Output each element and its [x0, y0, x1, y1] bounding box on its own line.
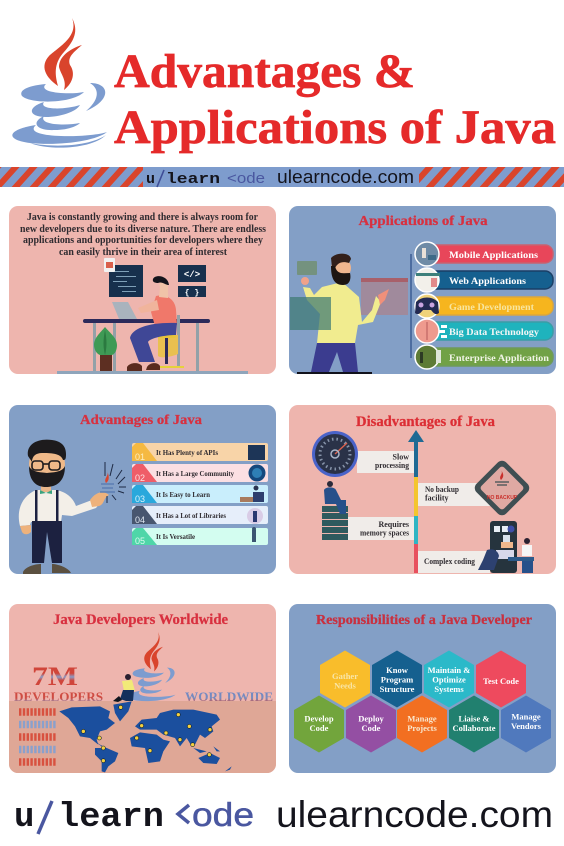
item: Web Applications: Web Applications	[449, 277, 526, 287]
intro text	[20, 212, 266, 258]
item: 02 large community	[132, 464, 268, 483]
heading: Advantages of Java	[80, 413, 202, 428]
lower band	[9, 701, 276, 773]
brand banner: learn	[166, 171, 220, 188]
icon: speedometer	[312, 431, 358, 477]
hexagon: Know Program Structure: Structure	[380, 684, 415, 694]
text: requires memory spaces	[360, 520, 409, 538]
panel: Java developers worldwide	[9, 604, 276, 773]
timeline arrow	[408, 430, 424, 573]
item: Web Applications	[415, 268, 553, 292]
hexagon: Maintain and Optimize Systems: Optimize	[432, 674, 466, 684]
hexagon: Liaise and Collaborate: Liaise &	[459, 714, 489, 724]
footer brand: ulearncode.com	[276, 794, 553, 835]
hexagon: Test Code	[476, 650, 526, 708]
hexagon: Know Program Structure	[372, 650, 422, 708]
hexagon: Manage Vendors	[501, 696, 551, 752]
item: Enterprise Application: Enterprise Application	[449, 354, 550, 364]
illustration: developer at desk: { }	[185, 289, 199, 298]
hexagon: Know Program Structure: Know	[386, 665, 409, 675]
text: slow processing	[375, 452, 409, 470]
illustration: person climbing	[113, 674, 135, 702]
intro text: can easily thrive in their area of interest	[59, 247, 228, 258]
worldwide label: WORLDWIDE	[185, 690, 273, 704]
intro text: new developers due to its diverse nature. There are endless	[20, 224, 266, 235]
text: requires memory spaces: Requires	[378, 520, 409, 529]
hexagon: Deploy Code: Code	[362, 723, 381, 733]
item: Enterprise Application	[415, 345, 553, 369]
heading: Responsibilities of a Java Developer	[316, 613, 532, 628]
item: Game Development: Game Development	[449, 303, 535, 313]
hexagon: Gather Needs	[320, 650, 370, 708]
world map	[59, 701, 232, 772]
hexagon: Gather Needs: Needs	[334, 680, 357, 690]
text: requires memory spaces: memory spaces	[360, 528, 409, 538]
people rows	[19, 712, 57, 762]
hexagon: Develop Code: Code	[310, 723, 329, 733]
item: Big Data Technology	[415, 319, 553, 343]
intro text: applications and opportunities for developers where they	[23, 235, 263, 246]
hexagon: Manage Projects: Manage	[407, 714, 437, 724]
footer brand	[14, 794, 553, 837]
illustration: phone with developers	[478, 521, 534, 573]
text: no backup facility	[425, 485, 460, 502]
icon: no backup diamond: NO BACKUP	[487, 495, 518, 501]
hexagon: Develop Code	[294, 696, 344, 752]
hexagon: Gather Needs: Gather	[332, 671, 358, 681]
text: no backup facility: No backup	[425, 485, 460, 494]
developers label: DEVELOPERS	[14, 690, 103, 704]
icon: server stack with person	[322, 481, 348, 540]
text: no backup facility: facility	[425, 494, 449, 502]
text: slow processing: processing	[375, 461, 409, 470]
icon: Java cup	[128, 632, 176, 701]
brand banner	[0, 167, 564, 188]
panel: applications of Java	[289, 206, 556, 374]
hexagon: Maintain and Optimize Systems: Maintain &	[428, 665, 470, 675]
text: complex coding: Complex coding	[424, 557, 475, 566]
item: 01 plenty of APIs: 01	[135, 452, 145, 462]
icon: no backup diamond	[472, 458, 532, 518]
hexagon: Know Program Structure: Program	[381, 674, 413, 684]
panel: disadvantages of Java	[289, 405, 556, 574]
hexagon: Manage Vendors: Manage	[511, 712, 541, 722]
7M label: 7M	[32, 662, 78, 691]
icon: Java logo	[12, 18, 107, 148]
item: Big Data Technology: Big Data Technology	[449, 328, 539, 338]
hexagon: Develop Code: Develop	[304, 714, 334, 724]
item: Mobile Applications: Mobile Applications	[449, 251, 538, 261]
icon: Java cup with radiating arrows	[100, 462, 126, 503]
item: 04 lot of libraries	[132, 506, 268, 525]
illustration: developer at desk	[57, 258, 248, 374]
connector line	[410, 254, 412, 358]
hexagon: Maintain and Optimize Systems: Systems	[434, 684, 464, 694]
item: 03 easy to learn	[132, 485, 268, 504]
item: Game Development	[415, 294, 553, 318]
hexagon: Maintain and Optimize Systems	[424, 650, 474, 708]
hexagon: Liaise and Collaborate	[449, 696, 499, 752]
item: 04 lot of libraries: It Has a Lot of Libraries	[156, 511, 226, 520]
heading: Disadvantages of Java	[356, 414, 495, 430]
title: Applications of Java	[114, 101, 556, 154]
hexagon: Test Code: Test Code	[483, 676, 519, 686]
brand banner: u	[146, 171, 155, 188]
footer brand: u	[14, 799, 34, 837]
brand banner: ulearncode.com	[277, 167, 414, 187]
title: Advantages &	[114, 45, 415, 98]
panel: advantages of Java	[9, 405, 276, 574]
hexagon: Deploy Code	[346, 696, 396, 752]
hexagon: Manage Projects	[397, 696, 447, 752]
panel: responsibilities of a Java developer	[289, 604, 556, 773]
heading: Java Developers Worldwide	[53, 612, 229, 628]
item: 05 versatile	[132, 527, 268, 546]
illustration: developer at desk: </>	[184, 270, 200, 280]
item: 05 versatile: 05	[135, 536, 145, 546]
footer brand: ode	[192, 796, 254, 833]
item: 01 plenty of APIs	[132, 443, 268, 462]
item: Mobile Applications	[415, 242, 553, 266]
map pins	[81, 705, 212, 763]
intro text: Java is constantly growing and there is always room for	[27, 212, 259, 223]
hexagon: Liaise and Collaborate: Collaborate	[453, 723, 496, 733]
item: 05 versatile: It Is Versatile	[156, 532, 196, 541]
heading: Applications of Java	[358, 214, 488, 229]
hexagon: Deploy Code: Deploy	[358, 714, 384, 724]
item: 03 easy to learn: 03	[135, 494, 145, 504]
item: 01 plenty of APIs: It Has Plenty of APIs	[156, 448, 218, 457]
brand banner: <ode	[227, 170, 265, 187]
illustration: bearded man pointing	[19, 440, 109, 574]
panel: introduction	[9, 206, 276, 374]
hexagon: Manage Projects: Projects	[407, 723, 437, 733]
item: 04 lot of libraries: 04	[135, 515, 145, 525]
text: slow processing: Slow	[393, 452, 409, 462]
item: 02 large community: It Has a Large Community	[156, 469, 234, 478]
hexagon: Manage Vendors: Vendors	[511, 721, 542, 731]
title	[114, 45, 556, 154]
item: 02 large community: 02	[135, 473, 145, 483]
callout boxes	[348, 451, 490, 573]
footer brand: learn	[58, 799, 164, 837]
illustration: presenter with floating screens	[290, 254, 408, 374]
item: 03 easy to learn: It Is Easy to Learn	[156, 490, 211, 499]
